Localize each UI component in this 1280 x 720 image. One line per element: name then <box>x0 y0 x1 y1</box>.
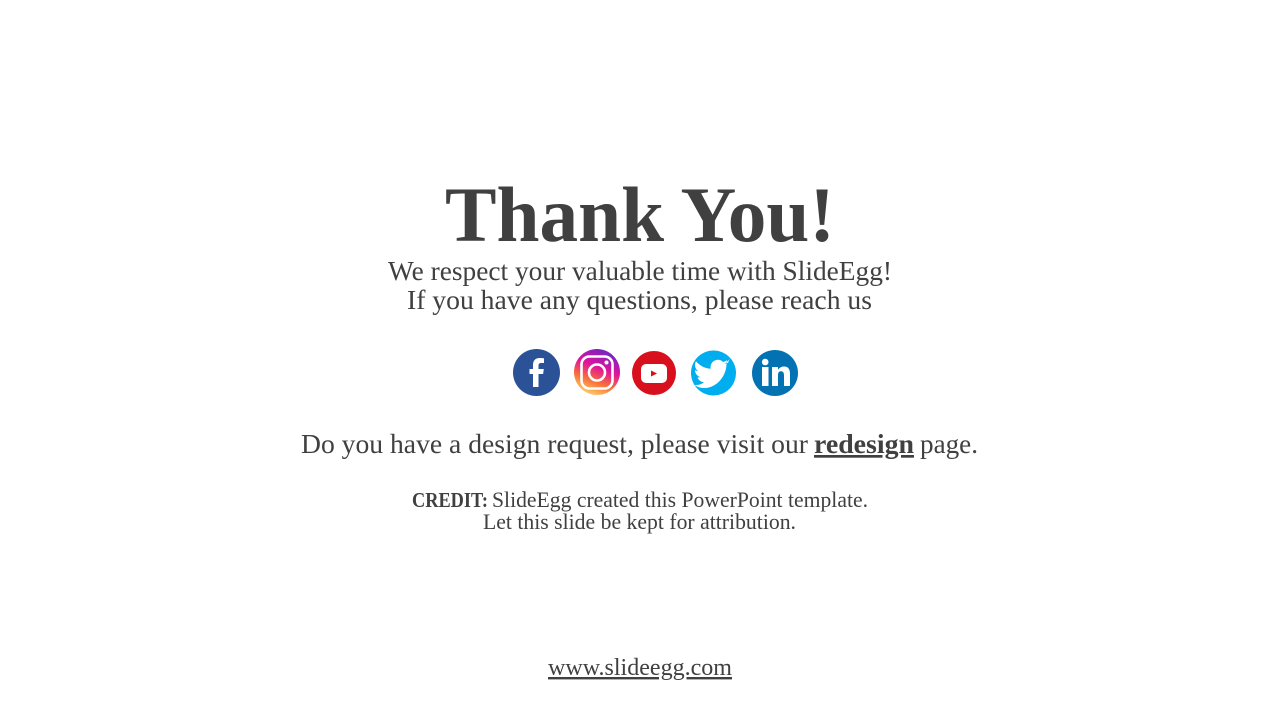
title: Thank You! <box>445 171 835 258</box>
website link: www.slideegg.com <box>548 655 732 681</box>
subtitle line 1: We respect your valuable time with SlideEgg! <box>388 256 892 286</box>
credit line 1: SlideEgg created this PowerPoint template. <box>492 487 868 512</box>
credit line 2: Let this slide be kept for attribution. <box>483 509 796 534</box>
page word: page. <box>920 429 978 459</box>
design request line <box>301 429 978 459</box>
subtitle line 2: If you have any questions, please reach us <box>407 285 872 315</box>
design request text: Do you have a design request, please visit our <box>301 429 808 459</box>
icon: linkedin <box>752 350 798 396</box>
icon: youtube <box>632 351 676 395</box>
social icons <box>513 349 798 396</box>
credit label: CREDIT: <box>412 488 488 512</box>
credit block <box>412 487 868 534</box>
icon: instagram <box>574 349 620 395</box>
icon: facebook <box>513 349 560 396</box>
redesign link: redesign <box>814 429 914 459</box>
icon: twitter <box>691 350 736 396</box>
